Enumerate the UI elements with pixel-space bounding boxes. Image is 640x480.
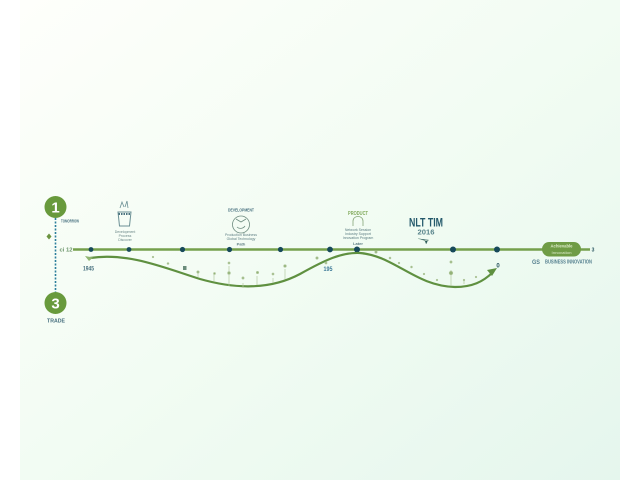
text: second milestone caption (225, 233, 257, 246)
icon: glass of plants (118, 201, 131, 226)
label: mid curve: 195 (324, 266, 333, 273)
icon: down arrow (418, 238, 429, 244)
heading: second milestone: DEVELOPMENT (228, 208, 254, 214)
vertical dotted connector (54, 218, 56, 293)
text: first milestone caption (115, 230, 135, 242)
milestone badge: 3: 3 (51, 296, 60, 312)
text: third milestone caption: Later (353, 241, 363, 246)
text: third milestone caption: Network Session (345, 228, 371, 232)
small plant icons along the curve (152, 251, 477, 288)
label: bottom badge caption: TRADE (47, 318, 65, 324)
icon: arch (353, 216, 363, 226)
growth curve with arrow (85, 253, 497, 287)
text: second milestone caption: Production Business (225, 233, 257, 237)
caption: below pill: GS (532, 260, 540, 266)
label: curve marker (183, 266, 186, 270)
text: first milestone caption: Process (119, 234, 132, 238)
end pill: Innovation (552, 250, 572, 255)
text: third milestone caption (343, 228, 373, 246)
label: curve start: 1945 (83, 266, 95, 272)
text: first milestone caption: Discover (118, 238, 133, 242)
end pill (542, 242, 581, 256)
main timeline line (73, 248, 590, 251)
caption: below pill: BUSINESS INNOVATION (545, 260, 592, 266)
text: second milestone caption: Path (237, 242, 246, 246)
heading: next time: NLT TIM (409, 216, 443, 230)
milestone badge: 1 (44, 196, 66, 218)
milestone badge: 1: 1 (51, 200, 60, 216)
label: top badge caption: TOMORROW (61, 218, 79, 224)
label: timeline start: ci 12 (60, 248, 73, 254)
text: third milestone caption: Industry Support (345, 232, 371, 236)
subheading: year: 2016 (418, 230, 435, 236)
heading: third milestone: PRODUCT (348, 211, 368, 217)
label: right value: 0 (496, 264, 500, 270)
milestone badge: 3 (44, 292, 66, 314)
icon: small diamond marker (46, 234, 52, 240)
end pill: Achievable (550, 244, 573, 248)
icon: round fruit (232, 216, 250, 233)
label: line end: 3 (592, 248, 595, 254)
timeline dots (89, 246, 500, 252)
caption: below pill (532, 260, 592, 266)
text: second milestone caption: Global Technology (227, 237, 256, 241)
text: third milestone caption: Innovation Program (343, 236, 373, 240)
text: first milestone caption: Development (115, 230, 135, 234)
